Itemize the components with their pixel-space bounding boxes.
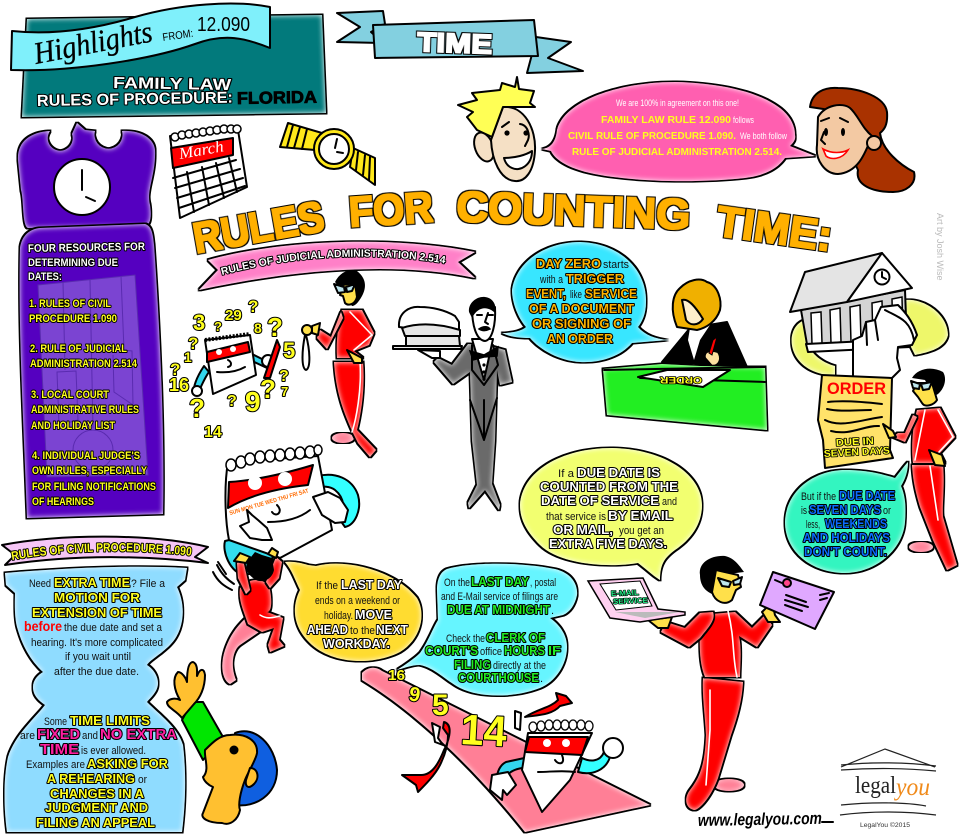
scattered numbers and question marks: ?	[214, 319, 222, 334]
list text: ADMINISTRATIVE RULES	[31, 404, 139, 416]
title: rules for counting time	[189, 183, 835, 263]
paper	[638, 370, 730, 387]
bubble text: WORKDAY.	[323, 636, 390, 651]
scattered numbers and question marks: ?	[267, 312, 283, 342]
list text: FOR FILING NOTIFICATIONS	[32, 481, 156, 493]
hourglass upper text: EXTENSION OF TIME	[32, 605, 162, 620]
bubble text: EVENT,	[526, 286, 566, 301]
hand and stopwatch	[312, 323, 362, 363]
bubble text: On the	[444, 577, 470, 589]
bubble text: SEVEN DAYS	[809, 502, 881, 517]
head	[472, 307, 495, 341]
bubble text	[425, 574, 561, 685]
hourglass upper text: EXTRA TIME	[54, 575, 130, 590]
hourglass upper text: Need	[29, 578, 51, 590]
tag body	[20, 224, 163, 518]
scattered numbers and question marks: 8	[254, 320, 262, 336]
bubble text: MOVE	[355, 607, 392, 622]
bubble text: and E-Mail service of filings are	[441, 591, 558, 603]
hourglass lower text: Some	[44, 716, 67, 728]
hourglass lower text: CHANGES IN A	[50, 786, 145, 801]
title: rules for counting time: FOR	[347, 183, 434, 237]
bubble text: SERVICE	[585, 286, 637, 301]
hair and face	[700, 556, 744, 595]
building	[801, 290, 907, 350]
road numbers: 14	[459, 706, 508, 756]
bubble text: CLERK OF	[486, 630, 545, 645]
bubble text: that service is	[546, 511, 606, 523]
tray and papers	[393, 307, 462, 349]
list text: ADMINISTRATION 2.514	[30, 358, 138, 370]
rings	[205, 334, 250, 340]
banner text: RULES OF CIVIL PROCEDURE 1.090	[10, 542, 192, 561]
scattered numbers and question marks: 7	[281, 384, 288, 399]
logo: LegalYou	[840, 749, 936, 829]
icon: wall calendar March	[170, 125, 247, 218]
bubble text: AHEAD	[307, 622, 348, 637]
bubble text: follows	[733, 115, 754, 125]
bubble text	[568, 98, 787, 158]
bubble text: WEEKENDS	[825, 516, 887, 531]
order text on paper: ORDER	[659, 375, 702, 385]
character: climbing figure with big calendar	[213, 445, 359, 684]
banner text: TIME	[417, 27, 493, 60]
heading: order: ORDER	[827, 379, 886, 398]
hourglass upper text: the due date and set a	[64, 622, 163, 634]
tuxedo	[434, 344, 512, 510]
number: 12.090: 12.090	[197, 14, 250, 36]
month label: March	[177, 138, 225, 163]
bubble text: FAMILY LAW RULE 12.090	[601, 115, 731, 126]
bubble text	[526, 256, 637, 346]
character: woman with order	[883, 369, 957, 570]
bubble text: OR SIGNING OF	[532, 316, 631, 331]
banner: time	[337, 11, 583, 73]
bubble text: If the	[316, 580, 338, 592]
panel: purple resources tag: DETERMINING DUE	[28, 257, 118, 269]
laptop screen text: E-MAIL	[611, 588, 639, 598]
icon: courthouse with arm	[790, 253, 948, 378]
bubble text: office	[480, 646, 502, 658]
bubble text: AND HOLIDAYS	[803, 530, 890, 545]
scattered numbers and question marks: ?	[248, 297, 258, 316]
clock	[54, 159, 110, 215]
list text: OF HEARINGS	[32, 496, 94, 508]
rings	[226, 445, 322, 471]
panel: hourglass	[4, 567, 187, 832]
bubble text: like	[570, 289, 582, 301]
logo word you: you	[893, 774, 930, 801]
bubble text: to the	[350, 625, 375, 637]
hand	[418, 350, 440, 358]
hourglass lower text: are	[20, 730, 35, 742]
hourglass upper text: MOTION FOR	[54, 590, 141, 605]
bubble text: RULE OF JUDICIAL ADMINISTRATION 2.514.	[572, 147, 782, 158]
scattered numbers and question marks: ?	[260, 374, 276, 404]
ribbon: rules of judicial administration	[198, 240, 476, 292]
title: rules for counting time: COUNTING	[456, 183, 691, 239]
logo copyright: LegalYou ©2015	[860, 821, 910, 829]
bubble text: DAY ZERO	[536, 256, 601, 271]
speech bubble: agreement	[542, 82, 815, 181]
hourglass lower text	[20, 713, 177, 830]
script: Highlights: Highlights	[30, 14, 155, 71]
document: order due in seven days	[818, 375, 893, 468]
pen	[264, 340, 280, 378]
faint building	[38, 275, 148, 477]
hourglass upper text: if you wait until	[65, 651, 131, 663]
due text: DUE IN	[836, 436, 874, 449]
ribbons at finish line	[402, 693, 572, 792]
panel: highlights header	[11, 4, 326, 117]
bubble text: .	[551, 605, 554, 617]
scattered numbers and question marks: 16	[169, 375, 189, 395]
bubble text: DUE AT MIDNIGHT	[447, 602, 550, 617]
icon: brunette woman	[810, 88, 914, 192]
page	[225, 456, 332, 558]
bubble text: directly at the	[493, 660, 546, 672]
bubble text: LAST DAY	[471, 574, 529, 589]
scattered numbers and question marks: 3	[193, 310, 205, 335]
bubble text: COUNTED FROM THE	[540, 479, 678, 494]
bubble text: BY EMAIL	[608, 508, 673, 523]
scattered numbers and question marks: 9	[245, 386, 261, 417]
scattered numbers and question marks	[169, 297, 295, 441]
list text: 4. INDIVIDUAL JUDGE'S	[32, 450, 140, 462]
hourglass lower text: TIME LIMITS	[70, 713, 150, 728]
desk	[603, 364, 767, 430]
hand	[853, 305, 917, 378]
bubble text	[307, 577, 408, 651]
speech bubble: last day workday	[285, 562, 422, 661]
bubble text: .	[540, 673, 543, 685]
list text: OWN RULES, ESPECIALLY	[32, 465, 148, 477]
arm	[318, 475, 359, 527]
logo word legal: legal	[855, 773, 896, 799]
hourglass lower text: FIXED	[37, 726, 80, 743]
bubble text: LAST DAY	[341, 577, 402, 592]
hourglass lower text: Examples are	[26, 759, 85, 771]
bubble text: starts	[603, 259, 629, 271]
hourglass lower text: FILING AN APPEAL	[36, 815, 155, 830]
speech bubble: day zero	[502, 242, 668, 362]
bubble text: COURT'S	[425, 643, 478, 658]
road numbers: 16	[388, 667, 405, 684]
scattered numbers and question marks: 14	[204, 424, 222, 441]
bubble text: FILING	[454, 657, 491, 672]
scattered numbers and question marks: ?	[227, 393, 237, 410]
title: rules for counting time: RULES	[189, 193, 328, 263]
ribbon text: RULES OF JUDICIAL ADMINISTRATION 2.514	[220, 248, 446, 276]
bubble text: DUE DATE	[839, 488, 895, 503]
hourglass upper text: hearing. It's more complicated	[31, 637, 163, 649]
hair and face	[335, 270, 365, 306]
bubble text: and	[662, 496, 677, 508]
bubble text: , postal	[530, 577, 556, 589]
scattered numbers and question marks: 5	[283, 338, 295, 363]
hourglass lower text: A REHEARING	[47, 771, 135, 786]
bubble text: is	[801, 505, 807, 517]
bubble text: OR MAIL,	[553, 522, 613, 537]
heading: florida: FLORIDA	[237, 88, 317, 108]
hourglass lower text: and	[82, 730, 98, 742]
icon: blond man	[458, 77, 535, 181]
scattered numbers and question marks: ?	[170, 360, 180, 379]
list text	[29, 298, 156, 508]
heading text: FOUR RESOURCES FOR	[28, 241, 145, 255]
bubble text: DUE DATE IS	[577, 465, 660, 480]
bubble text: OF A DOCUMENT	[529, 301, 634, 316]
panel: purple resources tag	[18, 123, 163, 518]
title: rules for counting time: TIME:	[714, 197, 835, 261]
hourglass upper text	[24, 575, 166, 678]
hands	[313, 492, 348, 523]
ribbon: highlights	[11, 4, 270, 70]
bubble text: We are 100% in agreement on this one!	[616, 98, 739, 108]
bubble text: TRIGGER	[566, 271, 625, 286]
label: from: FROM:	[162, 28, 194, 44]
character: judge at desk	[603, 280, 767, 430]
icon: small calendar with pen	[192, 334, 280, 396]
hourglass lower text: TIME	[40, 741, 79, 758]
bubble text: COURTHOUSE	[458, 670, 539, 685]
hourglass lower text: ASKING FOR	[87, 756, 169, 771]
bubble text: AN ORDER	[547, 331, 614, 346]
list text: PROCEDURE 1.090	[29, 313, 117, 325]
laptop	[648, 617, 672, 628]
panel: purple resources tag: DATES:	[28, 271, 62, 283]
hourglass lower text: NO EXTRA	[100, 726, 177, 743]
road numbers: 5	[432, 689, 449, 722]
list text: AND HOLIDAY LIST	[31, 420, 115, 432]
heading: family law: FAMILY LAW	[113, 75, 232, 94]
figure	[222, 617, 262, 684]
bubble text: Check the	[446, 633, 485, 645]
envelope	[762, 602, 780, 622]
character: man with laptop and envelope: SERVICE	[613, 596, 648, 606]
hourglass upper text: after the due date.	[54, 666, 139, 678]
scattered numbers and question marks: ?	[189, 393, 205, 423]
character: running calendar	[490, 720, 623, 812]
calendar rings	[171, 125, 241, 141]
website url: www.legalyou.com	[698, 809, 822, 830]
bubble text: ends on a weekend or	[315, 595, 400, 607]
list text: 1. RULES OF CIVIL	[29, 298, 111, 310]
list text: 3. LOCAL COURT	[31, 389, 109, 401]
credit: art by Josh Wise: Art by Josh Wise	[935, 213, 945, 281]
bubble text: HOURS	[504, 643, 545, 658]
document: order due in seven days: SEVEN DAYS	[824, 446, 890, 460]
bubble text: holiday.	[324, 610, 353, 622]
banner: rules of civil procedure	[1, 536, 209, 566]
hourglass lower text: is ever allowed.	[81, 745, 146, 757]
scattered numbers and question marks: 29	[225, 307, 242, 324]
bubble text: If a	[558, 468, 575, 480]
tag top with clock	[18, 123, 155, 228]
hourglass upper text: ? File a	[131, 578, 166, 590]
bubble text: you get an	[619, 525, 664, 537]
scattered numbers and question marks: ?	[279, 368, 289, 385]
road numbers: 9	[407, 683, 422, 707]
road numbers	[388, 667, 508, 756]
character: waiter with papers	[393, 297, 512, 510]
character: woman with stopwatch	[302, 270, 376, 457]
hourglass lower text: or	[138, 774, 147, 786]
bubble text: DATE OF SERVICE	[541, 493, 659, 508]
speech bubble: seven days or less	[785, 462, 908, 573]
bubble text	[540, 465, 678, 551]
bubble text: DON'T COUNT.	[804, 544, 887, 559]
speech bubble: last day midnight	[397, 564, 577, 696]
heading: rules of procedure: RULES OF PROCEDURE:	[37, 90, 233, 110]
scattered numbers and question marks: ?	[188, 334, 198, 353]
character: reaching man	[167, 662, 277, 824]
road: pink path	[362, 668, 650, 832]
weekdays: SUN MON TUE WED THU FRI SAT	[229, 488, 310, 517]
bubble text: But if the	[801, 491, 836, 503]
bubble text: less,	[806, 519, 820, 531]
hourglass upper text: before	[24, 618, 62, 634]
bubble text: EXTRA FIVE DAYS.	[549, 536, 667, 551]
speech bubble: extra five days	[520, 448, 702, 580]
bubble text	[801, 488, 895, 559]
bubble text: or	[883, 505, 891, 517]
bubble text: IF	[548, 643, 561, 658]
list text: 2. RULE OF JUDICIAL	[30, 343, 127, 355]
bubble text: with a	[539, 274, 564, 286]
bubble text: CIVIL RULE OF PROCEDURE 1.090.	[568, 131, 736, 142]
bubble text: We both follow	[740, 131, 787, 141]
scattered numbers and question marks: 1	[184, 349, 192, 365]
icon: wristwatch	[280, 123, 375, 185]
hourglass lower text: JUDGMENT AND	[45, 800, 148, 815]
character: man with laptop and envelope	[588, 556, 834, 810]
bubble text: NEXT	[376, 622, 408, 637]
